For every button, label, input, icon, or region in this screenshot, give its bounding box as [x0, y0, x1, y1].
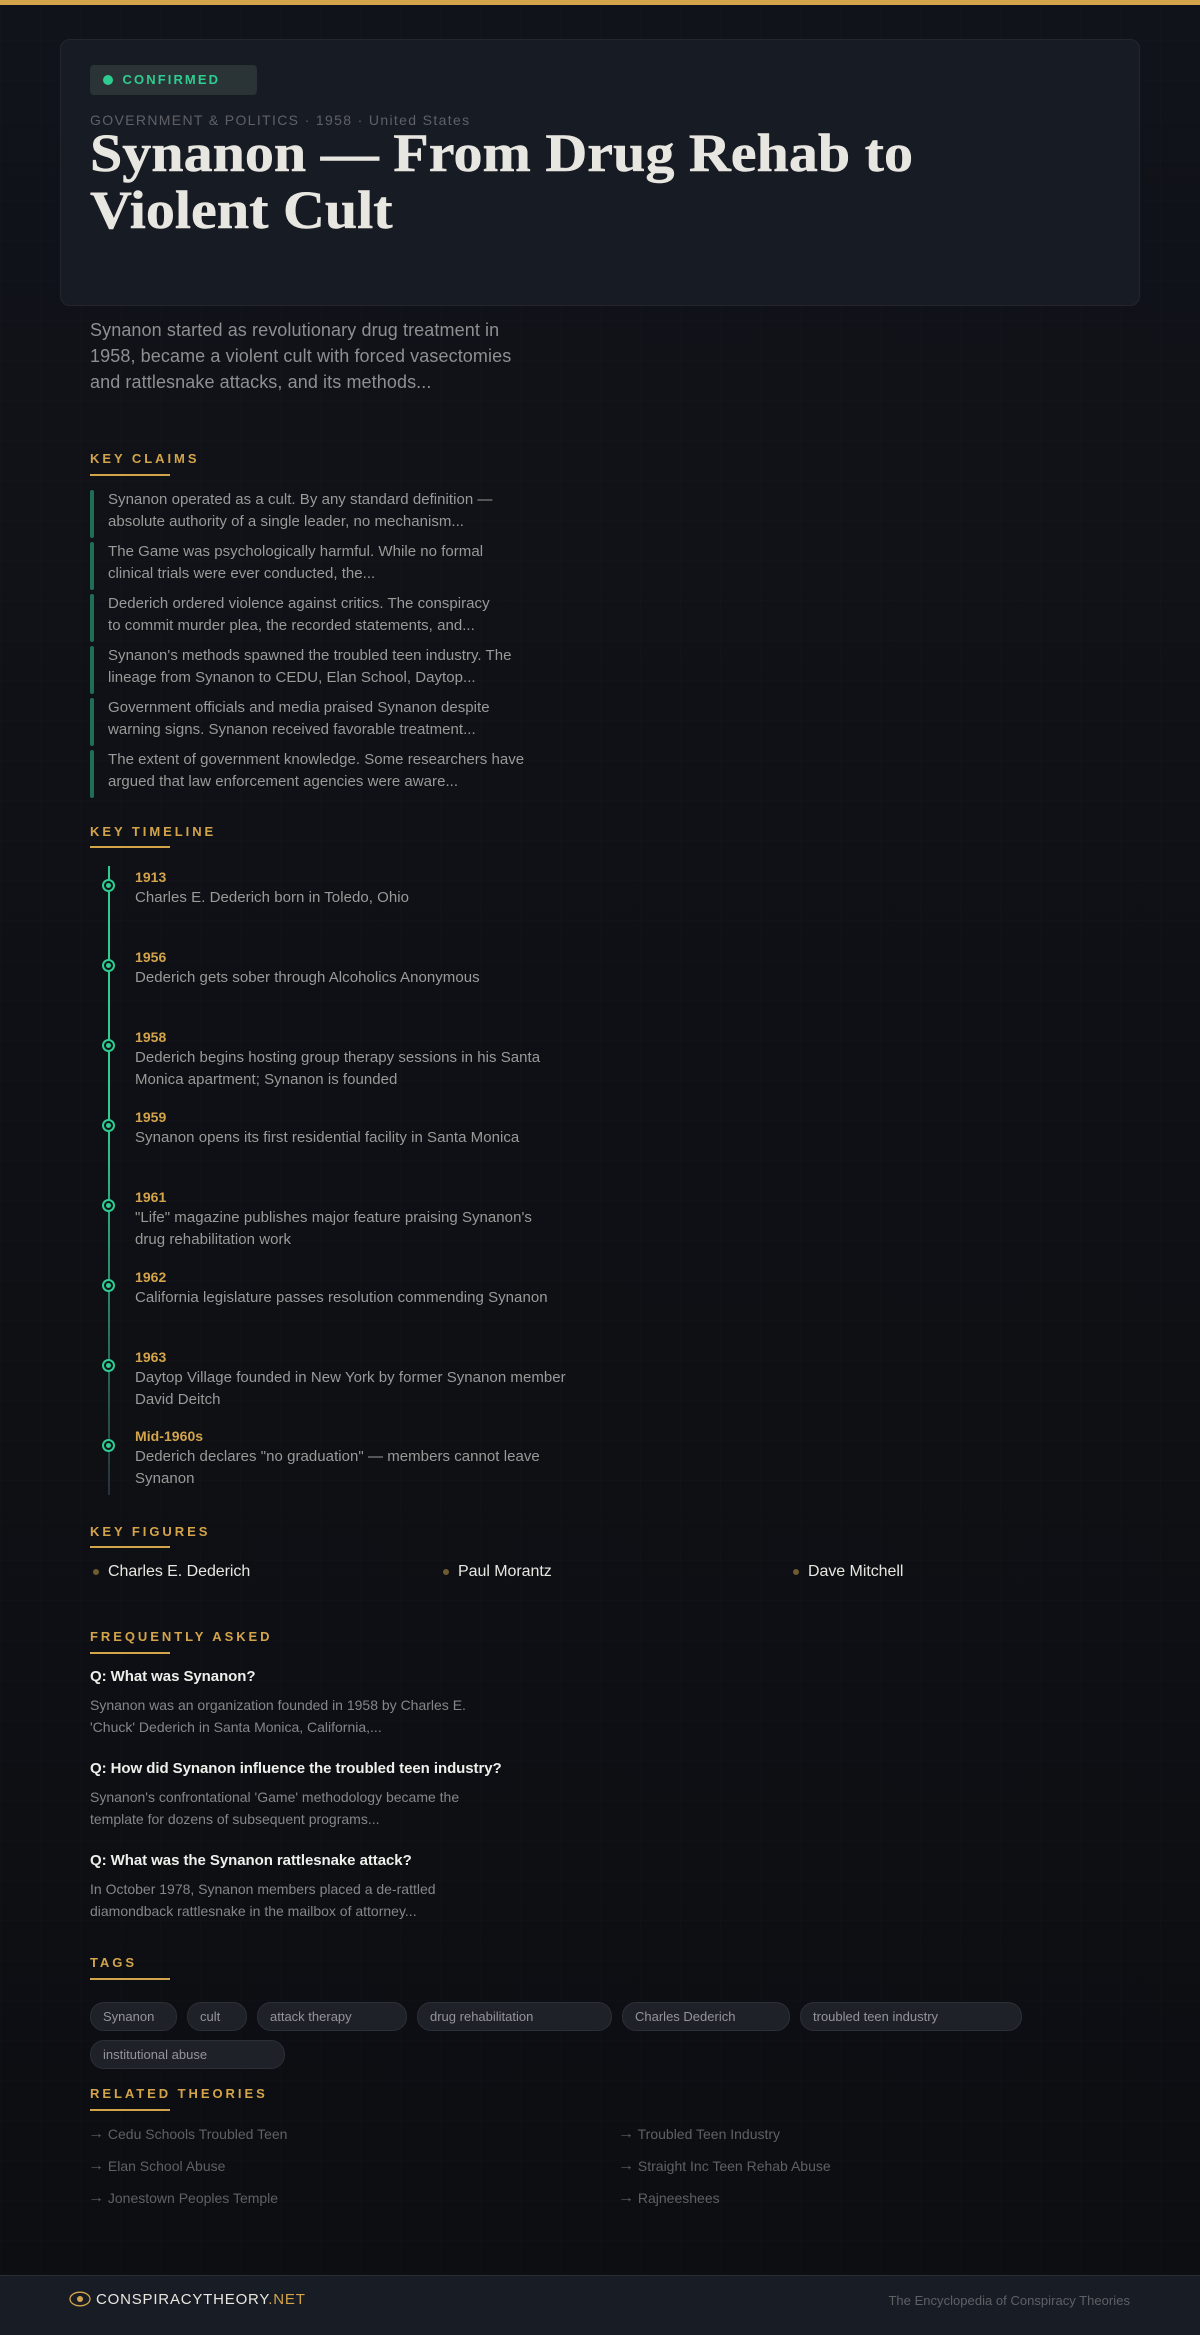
figure: Dave Mitchell: Dave Mitchell [808, 1563, 903, 1580]
top accent bar [0, 0, 1200, 5]
timeline dot 1958 [102, 1039, 115, 1052]
tag: cult [200, 2009, 220, 2024]
faq 2 question: Q: How did Synanon influence the troubled teen industry? [90, 1760, 502, 1777]
timeline dot 1959 [102, 1119, 115, 1132]
tags list [90, 2002, 1022, 2069]
timeline dot mid-1960s [102, 1439, 115, 1452]
text: Mid-1960s [135, 1428, 203, 1444]
tag: drug rehabilitation [430, 2009, 533, 2024]
related link: → [618, 2157, 634, 2173]
claim 5: warning signs. Synanon received favorable treatment... [108, 721, 476, 738]
claim 2 [90, 542, 483, 590]
text: Charles E. Dederich born in Toledo, Ohio [135, 889, 409, 906]
related link: → [88, 2125, 104, 2141]
faq 2 answer: template for dozens of subsequent programs... [90, 1811, 380, 1827]
related link: Straight Inc Teen Rehab Abuse [638, 2158, 831, 2174]
tag: institutional abuse [103, 2047, 207, 2062]
text: 1958 [135, 1029, 166, 1045]
figure: Paul Morantz: Paul Morantz [458, 1563, 552, 1580]
text: 1963 [135, 1349, 166, 1365]
faq 3 answer [90, 1881, 436, 1919]
timeline dot 1956 [102, 959, 115, 972]
footer tagline: The Encyclopedia of Conspiracy Theories [888, 2293, 1130, 2308]
claim 6: argued that law enforcement agencies were aware... [108, 773, 458, 790]
entry 1956 [135, 949, 480, 986]
faq 1 answer: 'Chuck' Dederich in Santa Monica, California,... [90, 1719, 382, 1735]
title [90, 123, 913, 240]
text: drug rehabilitation work [135, 1231, 291, 1248]
timeline dots [102, 879, 115, 1452]
entry 1962 [135, 1269, 548, 1306]
timeline dot 1961 [102, 1199, 115, 1212]
summary text: 1958, became a violent cult with forced vasectomies [90, 346, 511, 366]
related link: Jonestown Peoples Temple [108, 2190, 278, 2206]
icon: status dot [103, 75, 113, 85]
tag: Synanon [103, 2009, 154, 2024]
heading: key timeline: KEY TIMELINE [90, 824, 216, 839]
summary text: Synanon started as revolutionary drug treatment in [90, 320, 499, 340]
tag: troubled teen industry [813, 2009, 938, 2024]
claim 3: Dederich ordered violence against critics. The conspiracy [108, 595, 490, 612]
faq 1 answer [90, 1697, 466, 1735]
text: Monica apartment; Synanon is founded [135, 1071, 397, 1088]
claim 3: to commit murder plea, the recorded statements, and... [108, 617, 475, 634]
faq 1 question: Q: What was Synanon? [90, 1668, 255, 1685]
related link: → [618, 2125, 634, 2141]
title: Violent Cult [90, 180, 393, 240]
tag [90, 2002, 177, 2031]
faq 2 answer: Synanon's confrontational 'Game' methodology became the [90, 1789, 459, 1805]
tag [257, 2002, 407, 2031]
heading: key figures: KEY FIGURES [90, 1524, 210, 1539]
related link: Elan School Abuse [108, 2158, 225, 2174]
text: California legislature passes resolution commending Synanon [135, 1289, 548, 1306]
text: Synanon opens its first residential facility in Santa Monica [135, 1129, 519, 1146]
text: Dederich begins hosting group therapy sessions in his Santa [135, 1049, 540, 1066]
entry 1959 [135, 1109, 520, 1146]
tag [417, 2002, 612, 2031]
entry 1963 [135, 1349, 566, 1408]
timeline dot 1963 [102, 1359, 115, 1372]
text: 1961 [135, 1189, 166, 1205]
badge: confirmed status [90, 65, 257, 95]
claim 6 [90, 750, 524, 798]
text: Dederich gets sober through Alcoholics Anonymous [135, 969, 480, 986]
list: key claims [90, 490, 524, 798]
related link: Rajneeshees [638, 2190, 720, 2206]
related link: Troubled Teen Industry [638, 2126, 780, 2142]
faq 3 question: Q: What was the Synanon rattlesnake attack? [90, 1852, 412, 1869]
text: Synanon [135, 1470, 194, 1487]
summary text: and rattlesnake attacks, and its methods... [90, 372, 431, 392]
tag: Charles Dederich [635, 2009, 735, 2024]
text: 1959 [135, 1109, 166, 1125]
tag [187, 2002, 247, 2031]
faq 3 answer: diamondback rattlesnake in the mailbox of attorney... [90, 1903, 417, 1919]
claim 4 [90, 646, 511, 694]
claim 5: Government officials and media praised Synanon despite [108, 699, 490, 716]
tag [800, 2002, 1022, 2031]
summary text [90, 320, 511, 392]
entry 1913 [135, 869, 409, 906]
faq 3 answer: In October 1978, Synanon members placed a de-rattled [90, 1881, 436, 1897]
claim 2: The Game was psychologically harmful. While no formal [108, 543, 483, 560]
title: Synanon — From Drug Rehab to [90, 123, 913, 183]
related theory links [88, 2125, 831, 2206]
entry mid-1960s [135, 1428, 540, 1487]
timeline line [108, 866, 110, 1495]
related link: Cedu Schools Troubled Teen [108, 2126, 287, 2142]
related link: → [88, 2157, 104, 2173]
related link: → [88, 2189, 104, 2205]
faq 1 answer: Synanon was an organization founded in 1958 by Charles E. [90, 1697, 466, 1713]
related link: → [618, 2189, 634, 2205]
timeline entries [135, 869, 566, 1487]
text: Daytop Village founded in New York by former Synanon member [135, 1369, 566, 1386]
footer logo text: CONSPIRACYTHEORY.NET [96, 2291, 306, 2308]
faq 2 answer [90, 1789, 459, 1827]
text: David Deitch [135, 1391, 221, 1408]
text: "Life" magazine publishes major feature praising Synanon's [135, 1209, 532, 1226]
heading: key claims: KEY CLAIMS [90, 451, 199, 466]
claim 6: The extent of government knowledge. Some researchers have [108, 751, 524, 768]
tag: attack therapy [270, 2009, 352, 2024]
tag [622, 2002, 790, 2031]
heading: frequently asked: FREQUENTLY ASKED [90, 1629, 273, 1644]
claim 5 [90, 698, 490, 746]
claim 3 [90, 594, 490, 642]
claim 1 [90, 490, 492, 538]
claim 4: Synanon's methods spawned the troubled teen industry. The [108, 647, 511, 664]
text: 1962 [135, 1269, 166, 1285]
text: Dederich declares "no graduation" — members cannot leave [135, 1448, 540, 1465]
claim 1: Synanon operated as a cult. By any standard definition — [108, 491, 492, 508]
figure: Charles E. Dederich: Charles E. Dederich [108, 1563, 250, 1580]
entry 1961 [135, 1189, 532, 1248]
timeline dot 1913 [102, 879, 115, 892]
heading: related theories: RELATED THEORIES [90, 2086, 268, 2101]
tag [90, 2040, 285, 2069]
claim 1: absolute authority of a single leader, no mechanism... [108, 513, 464, 530]
footer [0, 2275, 1200, 2335]
entry 1958 [135, 1029, 540, 1088]
heading: tags: TAGS [90, 1955, 137, 1970]
claim 2: clinical trials were ever conducted, the... [108, 565, 375, 582]
timeline dot 1962 [102, 1279, 115, 1292]
text: 1956 [135, 949, 166, 965]
panel: hero header [60, 39, 1140, 306]
text: 1913 [135, 869, 166, 885]
category meta line: GOVERNMENT & POLITICS · 1958 · United States [90, 112, 470, 128]
claim 4: lineage from Synanon to CEDU, Elan School, Daytop... [108, 669, 476, 686]
badge label: CONFIRMED [122, 72, 220, 87]
icon: eye logo [69, 2292, 91, 2306]
